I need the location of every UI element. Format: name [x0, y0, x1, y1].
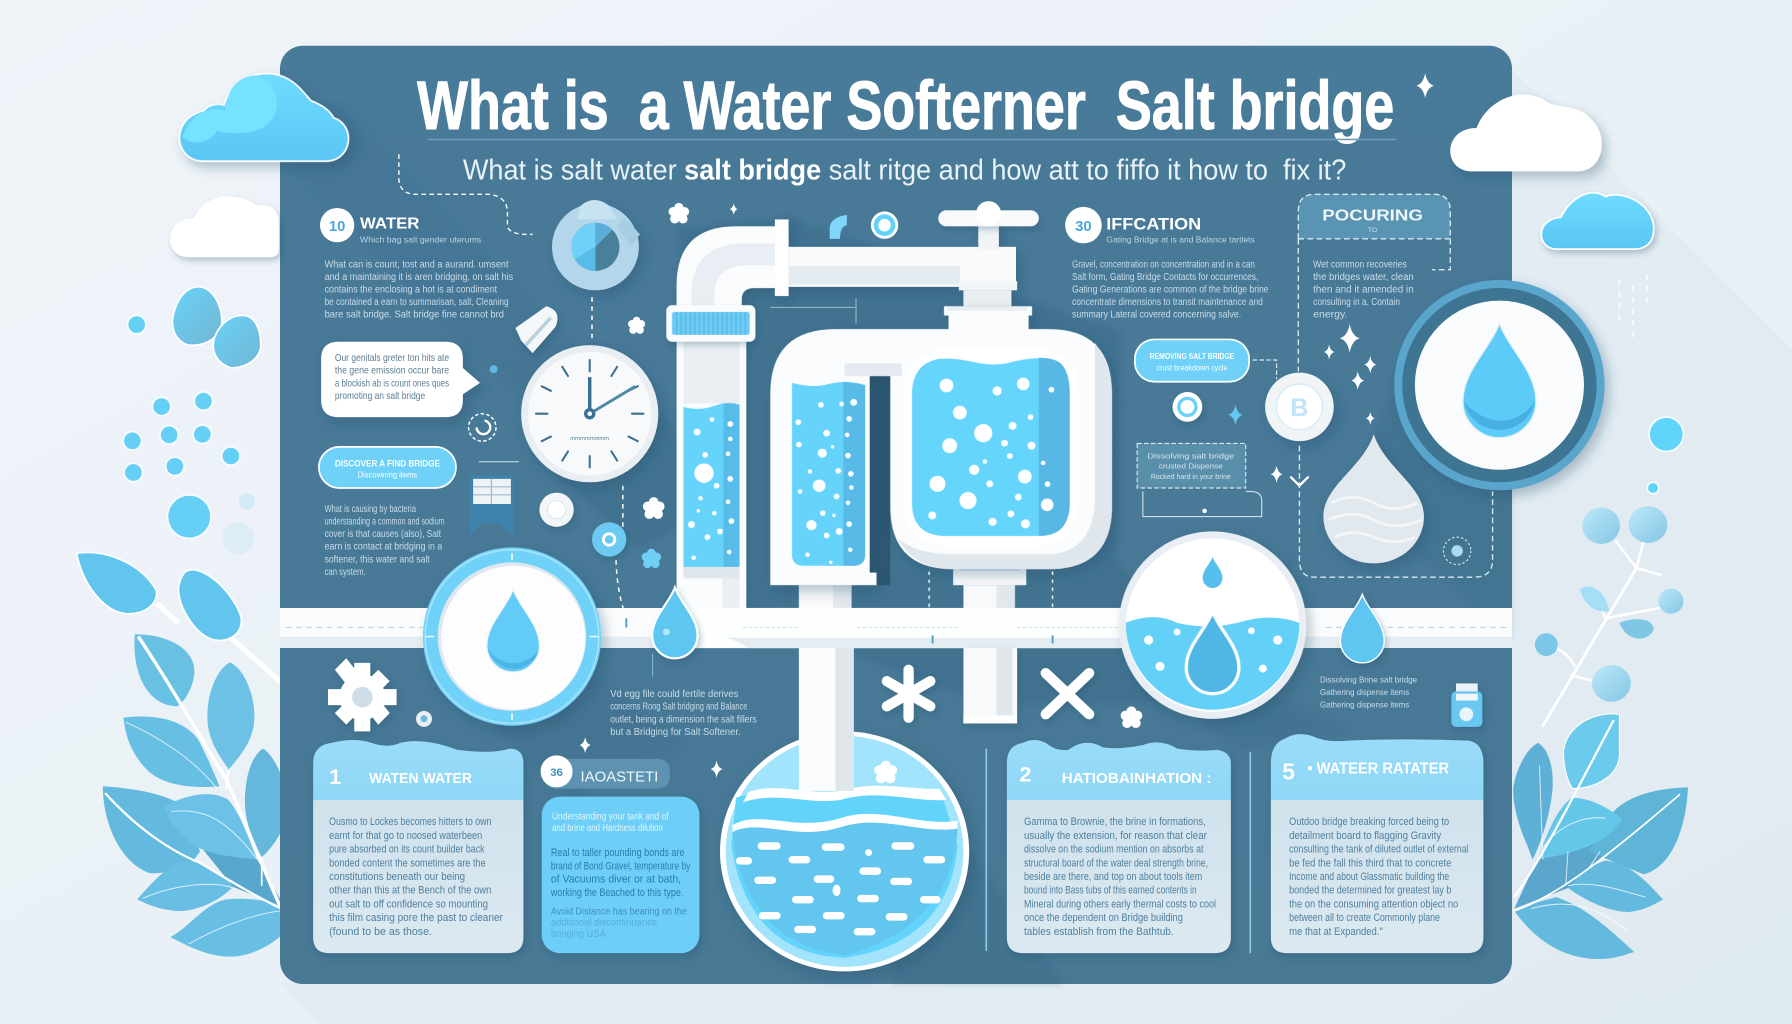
connector dashes	[592, 297, 626, 617]
section: iffication heading: IFFCATION	[1106, 215, 1201, 234]
card 1: out salt to off confidence so mounting	[329, 898, 488, 910]
water softener: left tube	[677, 342, 746, 611]
card 4: between all to create Commonly plane	[1289, 912, 1440, 924]
pill label right: REMOVING SALT BRIDGE	[1150, 351, 1235, 361]
card 3: structural board of the water deal strength brine,	[1024, 857, 1208, 869]
plant: right branch with berries	[1535, 506, 1683, 726]
top ring icon	[871, 211, 898, 239]
text block: center	[610, 689, 757, 738]
text block: left lower: What is causing by bacteria	[325, 504, 416, 515]
text block: iffication: Salt form, Gating Bridge Contacts for occurrences,	[1072, 272, 1258, 283]
text block: water: be contained a earn to summarisan, salt, Cleaning	[325, 297, 509, 308]
card 4: 5	[1282, 758, 1295, 784]
coin icon: B	[1290, 394, 1309, 422]
clock	[521, 345, 658, 482]
pill label left: Discovering items	[358, 471, 417, 480]
water softener: main tank water	[912, 358, 1070, 536]
text block: procuring: energy.	[1313, 310, 1347, 321]
subtitle: What is salt water salt bridge salt ritge and how att to fiffo it how to fix it?	[463, 154, 1346, 186]
card 3: bound into Bass tubs of this earned contents in	[1024, 885, 1197, 897]
card 3: HATIOBAINHATION :	[1062, 771, 1211, 787]
card 3	[1007, 740, 1231, 953]
soft panel shadow	[280, 69, 1792, 1024]
card 4: the on the consuming attention object no	[1289, 898, 1458, 910]
card 4: • WATEER RATATER	[1307, 761, 1449, 778]
text block: center: concerns Rong Salt bridging and Balance	[610, 702, 748, 713]
dots right	[1647, 417, 1683, 494]
dashed note box	[1137, 443, 1262, 517]
card 1: pure absorbed on its count builder back	[329, 844, 485, 856]
text block: center: outlet, being a dimension the salt fillers	[610, 714, 757, 725]
left gauge circle	[423, 547, 601, 726]
text block: water: and a maintaining it is aren bridging, on salt his	[325, 272, 513, 283]
balloon drops left	[172, 287, 261, 368]
thin line below drop	[652, 654, 654, 677]
card 2 heading: IAOASTETI	[581, 770, 658, 786]
text block: water: contains the enclosing a hot is at condiment	[325, 285, 497, 296]
speech bubble: promoting an salt bridge	[335, 391, 426, 402]
text block: procuring	[1313, 259, 1414, 321]
ring right	[1173, 392, 1202, 422]
card 3: beside are there, and top on about tools item	[1024, 871, 1202, 883]
card 2: Avoid Distance has bearing on the	[551, 906, 687, 917]
text block: lower right: Gathering dispense items	[1320, 699, 1409, 709]
card 3: once the dependent on Bridge building	[1024, 912, 1183, 924]
dashed vertical connector with chevron	[1299, 446, 1493, 577]
text block: iffication: summary Lateral covered concerning salve.	[1072, 310, 1241, 321]
text block: left lower: earn is contact at bridging in a	[325, 542, 443, 553]
thin leader lines	[770, 298, 856, 323]
water softener: left chamber water	[792, 382, 865, 566]
pipe tick marks	[626, 618, 1053, 643]
card 2: of Vacuums diver or at bath,	[551, 873, 681, 885]
cloud: blue top left	[179, 73, 348, 161]
chevron	[1290, 477, 1309, 486]
card 2: additional discontinuance	[551, 918, 658, 929]
top hook icon	[830, 215, 847, 239]
text block: left lower: softener, this water and salt	[325, 554, 430, 565]
text block: center: Vd egg file could fertile derives	[610, 689, 738, 700]
text block: left lower: cover is that causes (also), Salt	[325, 529, 441, 540]
blue dot	[490, 365, 498, 373]
text block: water	[325, 259, 513, 321]
text block: procuring: then and it amended in	[1313, 285, 1414, 296]
dashed note box: Dissolving salt bridge	[1147, 451, 1234, 460]
dashed arrow from title	[399, 154, 533, 234]
pill label right: crust breakdown cycle	[1157, 363, 1228, 372]
long diagonal shadows	[280, 103, 1589, 984]
card 3: Gamma to Brownie, the brine in formations,	[1024, 816, 1206, 828]
coin icon	[1265, 373, 1334, 441]
text block: iffication: Gravel, concentration on concentration and in a can	[1072, 259, 1255, 270]
pill label right	[1135, 339, 1249, 382]
clock: mmmmmmmm	[570, 436, 609, 442]
speech bubble: the gene emission occur bare	[335, 366, 450, 377]
title: What is a Water Softerner Salt bridge	[417, 67, 1394, 144]
card 1: earnt for that go to noosed waterbeen	[329, 830, 482, 842]
card 1: WATEN WATER	[369, 771, 472, 787]
large drop circle	[1394, 280, 1605, 490]
cloud: white top right	[1450, 95, 1602, 171]
card 4: be fed the fall this third that to concrete	[1289, 857, 1451, 869]
speech bubble	[321, 342, 480, 417]
text block: procuring: Wet common recoveries	[1313, 259, 1407, 270]
text block: lower right	[1320, 674, 1417, 709]
card 3: usually the extension, for reason that clear	[1024, 830, 1207, 842]
small coin	[416, 711, 432, 727]
text block: iffication: concentrate dimensions to transit maintenance and	[1072, 297, 1263, 308]
text block: iffication	[1072, 259, 1269, 321]
card 2: Understanding your tank and of	[552, 811, 669, 822]
gauge icon	[552, 200, 640, 290]
card 2	[542, 797, 699, 953]
valve handle	[938, 201, 1039, 226]
water softener: elbow pipe and horizontal run	[677, 217, 1017, 342]
horizontal pipeline band	[280, 608, 1512, 648]
card 3: Mineral during others early thermal costs to cool	[1024, 898, 1216, 910]
text block: left lower: understanding a common and sodium	[325, 517, 445, 528]
water softener: notch	[870, 376, 890, 585]
dashed box: procuring	[1298, 194, 1450, 371]
card 2 heading	[541, 755, 670, 789]
divider lines	[986, 749, 1250, 953]
sparkles	[580, 324, 1376, 778]
pill label left: DISCOVER A FIND BRIDGE	[335, 458, 440, 468]
section: water heading: WATER	[360, 216, 420, 233]
dashed box: procuring: TO	[1368, 227, 1377, 234]
right water circle	[1119, 531, 1306, 719]
book icon	[470, 475, 513, 536]
card 4: me that at Expanded."	[1289, 926, 1383, 938]
card 1	[313, 740, 523, 953]
card 2: brand of Bond Gravel, temperature by	[551, 861, 691, 873]
dashed box: procuring: POCURING	[1322, 208, 1423, 225]
card 1: Ousmo to Lockes becomes hitters to own	[329, 816, 491, 828]
dashed note box: Rocked hard in your brine	[1151, 472, 1231, 481]
plant: top left leaves	[77, 552, 281, 682]
card 2: working the Beached to this type.	[550, 887, 683, 899]
short line	[479, 461, 519, 463]
vertical pipe into tank	[799, 648, 854, 791]
card 1: (found to be as those.	[329, 926, 432, 938]
second lower pipe	[963, 648, 1017, 723]
text block: water: What can is count, tost and a aurand. umsent	[325, 259, 509, 270]
connector from pill	[1253, 360, 1277, 379]
rain marks right	[1619, 274, 1647, 337]
cloud: white left	[170, 196, 279, 257]
card 4: bonded the determined for greatest lay b	[1289, 885, 1451, 897]
pill label left	[319, 447, 456, 488]
section: iffication heading: 30	[1075, 219, 1092, 235]
card 1: this film casing pore the past to cleaner	[329, 912, 503, 924]
gear icon	[328, 658, 397, 731]
card 2: and brine and Hardness dilution	[552, 823, 663, 834]
card 3: dissolve on the sodium mention on absorbs at	[1024, 844, 1203, 856]
blue sparkle	[1228, 405, 1243, 425]
dashed note box: crusted Dispense	[1159, 462, 1223, 471]
blob icon	[1121, 706, 1142, 728]
water softener: tube collar	[666, 305, 755, 342]
text block: lower right: Gathering dispense items	[1320, 687, 1409, 697]
bottle icon	[1451, 683, 1482, 727]
text block: procuring: the bridges water, clean	[1313, 272, 1414, 283]
blue drop center	[652, 587, 698, 658]
asterisk icon	[887, 670, 930, 718]
card 2: bringing USA	[551, 929, 606, 940]
section: water heading	[320, 208, 481, 244]
speech bubble: a blockish ab is count ones ques	[335, 378, 449, 389]
section: iffication heading: Gating Bridge at is and Balance tartlets	[1106, 234, 1255, 244]
faint bubbles left	[222, 493, 255, 554]
text block: lower right: Dissolving Brine salt bridge	[1320, 674, 1417, 684]
card 4: consulting the tank of diluted outlet of external	[1289, 844, 1469, 856]
text block: water: bare salt bridge. Salt bridge fine cannot brd	[325, 310, 504, 321]
panel: main board	[280, 46, 1512, 984]
blue drop right	[1340, 594, 1384, 663]
card 1: 1	[329, 764, 341, 789]
wavy grey drop	[1323, 434, 1424, 563]
decorative dots left	[123, 315, 240, 538]
card 4: Outdoo bridge breaking forced being to	[1289, 816, 1449, 828]
text block: left lower	[325, 504, 445, 578]
dashed ring icon	[469, 414, 496, 441]
card 4: Income and about Glassmatic building the	[1289, 871, 1449, 883]
text block: center: but a Bridging for Salt Softener.	[610, 727, 741, 738]
section: iffication heading	[1065, 207, 1255, 244]
card 1: bonded content the sometimes are the	[329, 857, 486, 869]
text block: left lower: can system.	[325, 567, 366, 578]
cloud: blue right	[1541, 193, 1654, 249]
card 4: detailment board to flagging Gravity	[1289, 830, 1442, 842]
dashed connectors	[929, 571, 1053, 608]
main horizontal pipe	[686, 608, 1120, 648]
card 4	[1271, 734, 1483, 953]
card 2: Real to taller pounding bonds are	[551, 847, 685, 859]
card 3: tables establish from the Bathtub.	[1024, 926, 1174, 938]
water softener: lower necks	[799, 568, 1026, 610]
small dashed icon	[1443, 537, 1471, 565]
cross icon	[1046, 673, 1089, 714]
card 1: constitutions beneath our being	[329, 871, 465, 883]
small blue ring icon	[592, 522, 626, 557]
snow shapes	[628, 203, 738, 519]
white ring icon	[539, 493, 574, 527]
section: water heading: 10	[329, 219, 345, 235]
text block: procuring: consulting in a. Contain	[1313, 297, 1400, 308]
sparkle title	[1416, 73, 1434, 98]
speech bubble: Our genitals greter ton hits ate	[335, 353, 450, 364]
round brine tank	[720, 731, 969, 971]
pipe piece icon	[515, 306, 557, 353]
card 3: 2	[1019, 762, 1032, 787]
card 2 heading: 36	[550, 767, 563, 779]
section: water heading: Which bag salt gender uterums	[360, 234, 481, 244]
water softener: tank body	[770, 306, 1112, 585]
plant: bottom right leaves	[1513, 714, 1688, 959]
small blue blob	[642, 549, 661, 568]
title underline	[427, 138, 1397, 140]
card 1: other than this at the Bench of the own	[329, 885, 491, 897]
text block: iffication: Gating Generations are common of the bridge brine	[1072, 285, 1269, 296]
plant: bottom left leaves	[103, 634, 287, 957]
